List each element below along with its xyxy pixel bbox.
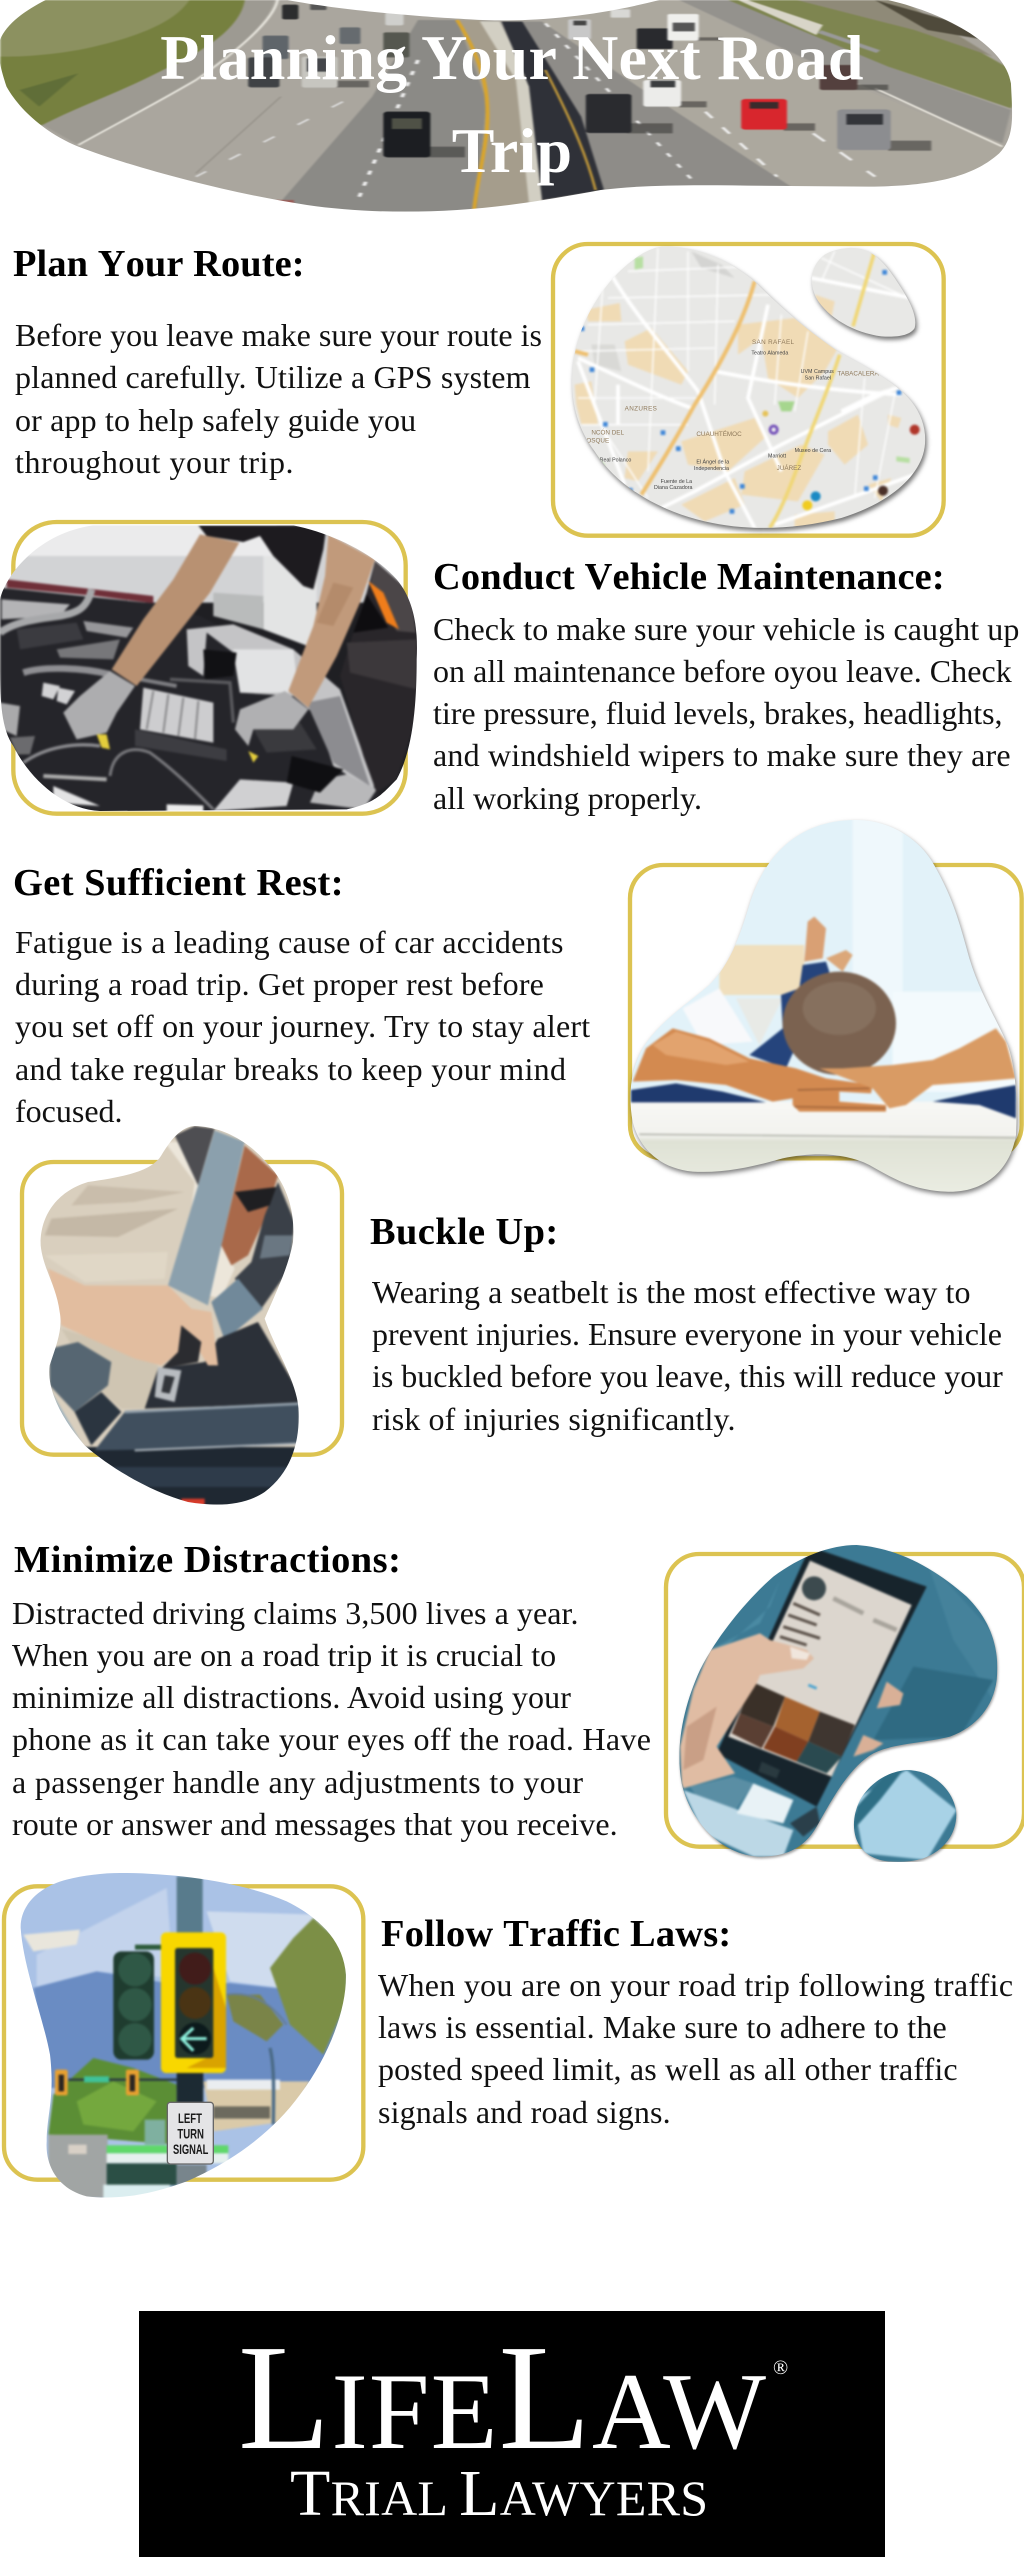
body text: is buckled before you leave, this will reduce your [372, 1358, 1003, 1394]
heading: Plan Your Route: [13, 242, 305, 284]
body text: on all maintenance before oyou leave. Check [433, 653, 1012, 689]
image: map blobs in gold frame: Diana Cazadora [654, 485, 693, 491]
image: map blobs in gold frame: SAN RAFAEL [752, 339, 795, 346]
body text [378, 1967, 1013, 2130]
image: hand fastening seatbelt in gold frame [20, 1126, 344, 1505]
image: map blobs in gold frame [550, 242, 946, 538]
panel: follow traffic laws [2, 1873, 1013, 2198]
body text [15, 924, 590, 1129]
body text: or app to help safely guide you [15, 402, 416, 438]
heading: Minimize Distractions: [14, 1539, 401, 1581]
logo text: ® [773, 2357, 788, 2379]
logo text: TRIAL LAWYERS [290, 2457, 708, 2530]
panel: minimize distractions [12, 1539, 1024, 1862]
body text: phone as it can take your eyes off the road. Have [12, 1721, 651, 1757]
body text: Fatigue is a leading cause of car accidents [15, 924, 564, 960]
image: map blobs in gold frame: ANZURES [625, 406, 657, 413]
body text [15, 317, 542, 480]
body text: throughout your trip. [15, 444, 294, 480]
body text: you set off on your journey. Try to stay alert [15, 1008, 590, 1044]
heading: Conduct Vehicle Maintenance: [433, 556, 945, 598]
image: map blobs in gold frame: El Ángel de la [696, 459, 729, 466]
body text: all working properly. [433, 780, 702, 816]
image: mechanic under hood in gold frame [0, 520, 417, 816]
body text [433, 611, 1019, 816]
panel: conduct vehicle maintenance [0, 520, 1019, 816]
image: map blobs in gold frame: JUÁREZ [777, 463, 801, 472]
road sign: SIGNAL [173, 2141, 209, 2157]
road sign: LEFT [178, 2110, 202, 2126]
body text: When you are on a road trip it is crucial to [12, 1637, 556, 1673]
image: map blobs in gold frame: OSQUE [586, 437, 609, 444]
title: Planning Your Next Road [160, 22, 864, 93]
image: hand holding phone in gold frame [664, 1545, 1024, 1862]
image: map blobs in gold frame: Teatro Alameda [751, 350, 788, 356]
panel: plan your route [13, 242, 946, 538]
hero photo blob [0, 0, 1012, 212]
panel: get sufficient rest [13, 819, 1024, 1198]
image: man resting on sofa in gold frame [628, 819, 1024, 1198]
body text: Wearing a seatbelt is the most effective way to [372, 1274, 971, 1310]
body text: a passenger handle any adjustments to your [12, 1764, 583, 1800]
body text: Distracted driving claims 3,500 lives a year. [12, 1595, 579, 1631]
image: map blobs in gold frame: Real Polanco [600, 457, 631, 463]
image: map blobs in gold frame: NCÓN DEL [591, 428, 625, 437]
image: map blobs in gold frame: TABACALERA [837, 370, 879, 377]
body text: planned carefully. Utilize a GPS system [15, 359, 531, 395]
cars [282, 5, 298, 19]
body text: When you are on your road trip following traffic [378, 1967, 1013, 2003]
body text: laws is essential. Make sure to adhere to the [378, 2009, 947, 2045]
body text: during a road trip. Get proper rest before [15, 966, 544, 1002]
body text: minimize all distractions. Avoid using your [12, 1679, 571, 1715]
body text: and take regular breaks to keep your mind [15, 1051, 566, 1087]
image: map blobs in gold frame: Marriott [768, 453, 787, 459]
heading: Follow Traffic Laws: [381, 1912, 731, 1954]
body text: Check to make sure your vehicle is caught up [433, 611, 1019, 647]
image: map blobs in gold frame: Fuente de La [661, 479, 692, 485]
image: map blobs in gold frame: CUAUHTÉMOC [696, 429, 742, 438]
road sign [167, 2102, 213, 2164]
body text [12, 1595, 651, 1842]
body text: risk of injuries significantly. [372, 1401, 736, 1437]
logo: LifeLaw Trial Lawyers [139, 2311, 885, 2557]
car shadows [336, 37, 931, 157]
heading: Buckle Up: [370, 1211, 559, 1253]
panel: buckle up [20, 1126, 1003, 1505]
body text: signals and road signs. [378, 2094, 671, 2130]
title: Trip [452, 115, 572, 186]
image: map blobs in gold frame: UVM Campus [801, 369, 834, 375]
body text: tire pressure, fluid levels, brakes, headlights, [433, 695, 1002, 731]
image: traffic signal in gold frame [2, 1873, 366, 2198]
image: map blobs in gold frame: San Rafael [805, 376, 831, 382]
title [160, 22, 864, 186]
body text: focused. [15, 1093, 123, 1129]
body text: posted speed limit, as well as all other traffic [378, 2051, 958, 2087]
body text: prevent injuries. Ensure everyone in your vehicle [372, 1316, 1002, 1352]
hero banner: highway photo with title [0, 0, 1012, 212]
body text: route or answer and messages that you receive. [12, 1806, 618, 1842]
road sign: TURN [177, 2126, 204, 2142]
logo text: LIFELAW [238, 2313, 767, 2481]
heading: Get Sufficient Rest: [13, 862, 344, 904]
body text: and windshield wipers to make sure they are [433, 737, 1011, 773]
body text: Before you leave make sure your route is [15, 317, 542, 353]
body text [372, 1274, 1003, 1437]
image: map blobs in gold frame: Museo de Cera [795, 448, 831, 454]
image: map blobs in gold frame: Independencia [694, 466, 729, 472]
